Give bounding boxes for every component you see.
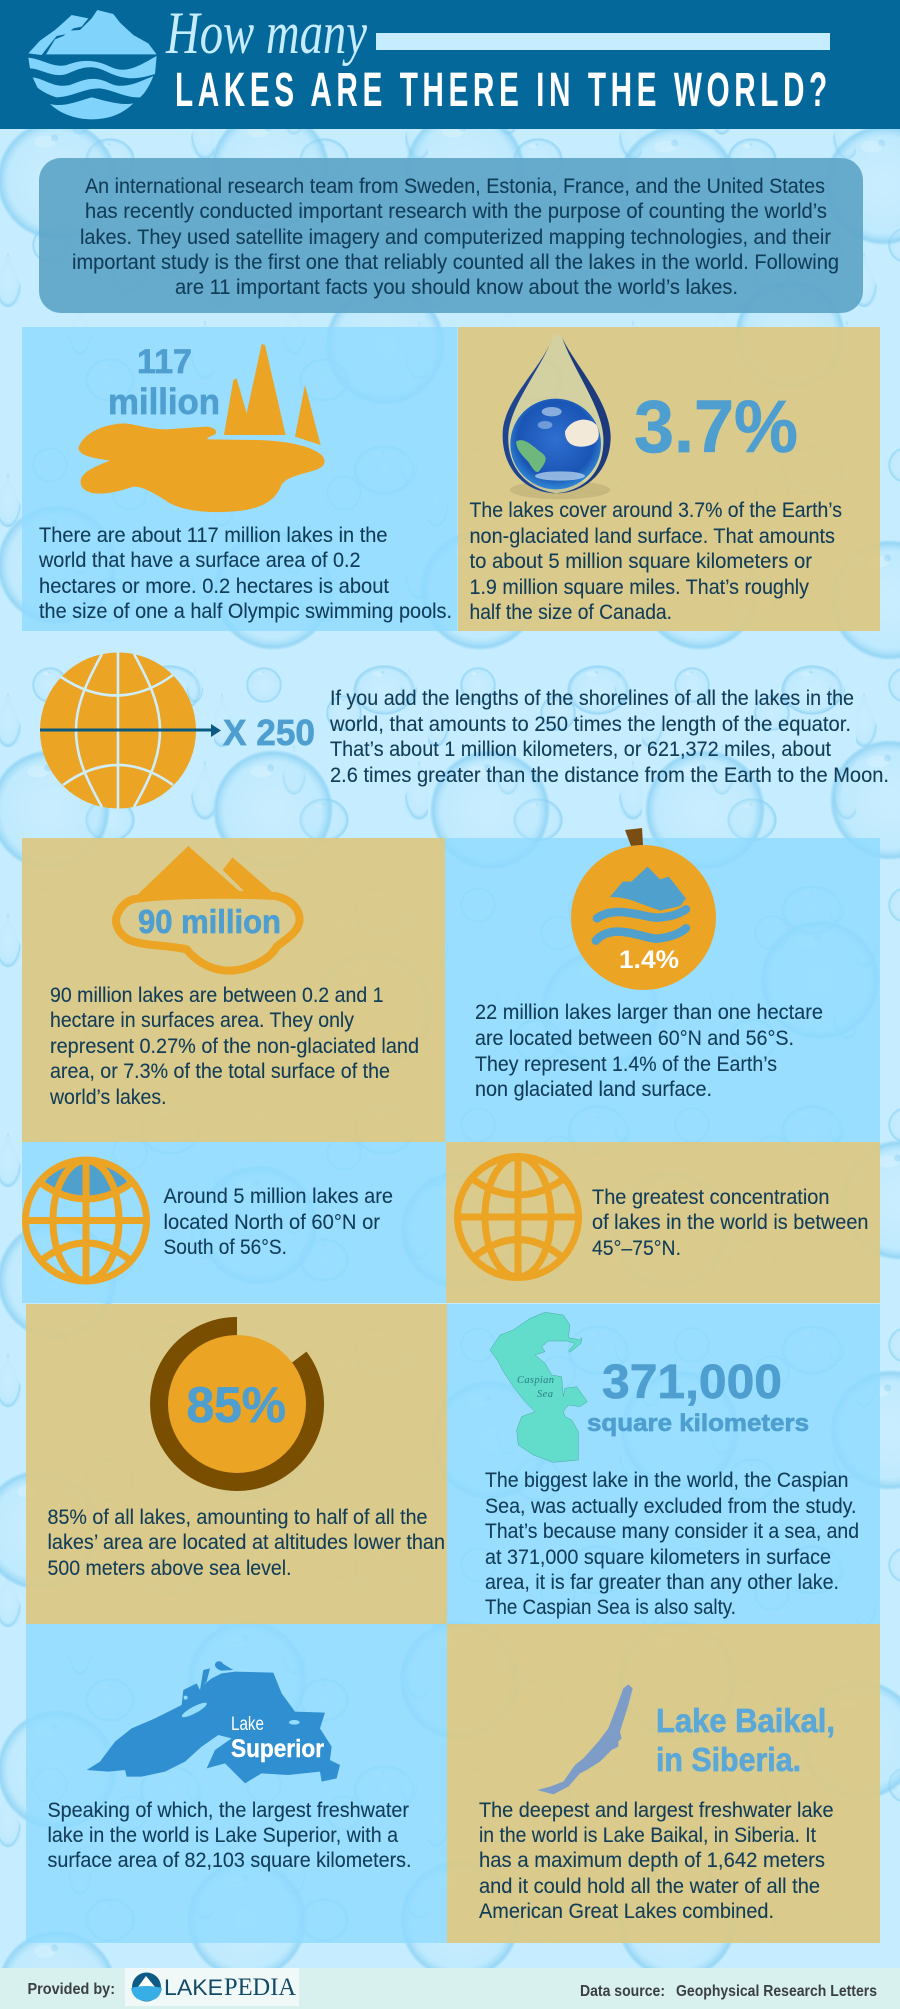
footer <box>0 1968 900 2009</box>
text: Lake Baikal: American Great Lakes combined. <box>479 1900 774 1923</box>
stat: 1.4%: 1.4% <box>619 946 679 974</box>
icon: Lake Superior map <box>87 1661 340 1783</box>
provided by label: Provided by: <box>28 1981 115 1998</box>
text: Lake Baikal <box>479 1799 834 1923</box>
text: 90 million: 90 million lakes are between 0.2 and 1 <box>50 984 384 1007</box>
icon: globe outline <box>457 1156 579 1278</box>
text: greatest concentration: The greatest concentration <box>592 1186 830 1209</box>
text: 5 million lakes: South of 56°S. <box>164 1236 287 1259</box>
section: shorelines x 250 <box>40 652 889 809</box>
icon: mountain and lake outline <box>116 846 300 971</box>
logo: LakePedia: LAKE <box>164 1975 223 2000</box>
icon: orange lake with peaks <box>78 344 325 512</box>
text: 85 percent: 500 meters above sea level. <box>48 1557 292 1580</box>
title script line: How many <box>165 0 367 66</box>
panel: intro <box>39 158 863 313</box>
stat: 117 million: 117 <box>137 343 192 381</box>
icon: Lake Superior map: Lake <box>231 1714 264 1735</box>
panel: Lake Superior <box>26 1624 447 1943</box>
text: Lake Baikal: in the world is Lake Baikal, in Siberia. It <box>479 1824 816 1847</box>
text: 3.7 percent: The lakes cover around 3.7% of the Earth’s <box>470 499 842 522</box>
text: Caspian Sea: The Caspian Sea is also salty. <box>485 1596 736 1619</box>
intro text: are 11 important facts you should know about the world’s lakes. <box>175 276 738 299</box>
text: 90 million: hectare in surfaces area. They only <box>50 1009 354 1032</box>
text: 3.7 percent: 1.9 million square miles. That’s roughly <box>470 576 809 599</box>
panel: 5 million lakes <box>22 1142 446 1303</box>
text: greatest concentration: of lakes in the world is between <box>592 1211 868 1234</box>
panel: 85 percent <box>26 1304 447 1624</box>
text: 3.7 percent: non-glaciated land surface. That amounts <box>470 525 835 548</box>
panel: 3.7 percent <box>458 327 880 631</box>
text: greatest concentration: 45°–75°N. <box>592 1237 681 1260</box>
text: 117 million lakes: There are about 117 million lakes in the <box>39 524 388 547</box>
icon: orange circle with iceberg and waves <box>571 828 716 990</box>
icon: Lake Superior map: Superior <box>231 1735 324 1763</box>
intro text <box>72 175 839 299</box>
text: Lake Superior: Speaking of which, the largest freshwater <box>48 1799 409 1822</box>
stat: 371,000 square kilometers <box>587 1356 809 1437</box>
text: 1.4 percent <box>475 1001 823 1101</box>
text: greatest concentration <box>592 1186 868 1260</box>
heading: Lake Baikal, in Siberia <box>656 1702 835 1778</box>
text: shorelines: world, that amounts to 250 times the length of the equator. <box>329 713 851 736</box>
data source <box>580 1983 877 2000</box>
logo: LakePedia <box>125 1968 299 2006</box>
text: Caspian Sea: The biggest lake in the world, the Caspian <box>485 1469 848 1492</box>
text: 1.4 percent: are located between 60°N and 56°S. <box>475 1027 794 1050</box>
text: 85 percent: 85% of all lakes, amounting to half of all the <box>48 1506 428 1529</box>
stat: 371,000 square kilometers: square kilometers <box>587 1410 809 1437</box>
stat: 85%: 85% <box>186 1377 286 1433</box>
text: Lake Baikal: and it could hold all the water of all the <box>479 1875 820 1898</box>
text: 90 million: represent 0.27% of the non-glaciated land <box>50 1035 419 1058</box>
text: Lake Superior: lake in the world is Lake Superior, with a <box>48 1824 398 1847</box>
icon: earth in water drop <box>503 334 611 499</box>
data source: Data source: <box>580 1983 665 2000</box>
chart: 85 percent ring <box>150 1317 324 1491</box>
text: shorelines: 2.6 times greater than the distance from the Earth to the Moon. <box>330 764 889 787</box>
icon: globe with polar cap <box>25 1158 147 1282</box>
text: Caspian Sea: Sea, was actually excluded from the study. <box>485 1495 856 1518</box>
stat: 117 million: million <box>108 381 220 422</box>
heading: Lake Baikal, in Siberia: Lake Baikal, <box>656 1702 835 1739</box>
text: 85 percent: lakes’ area are located at altitudes lower than <box>48 1531 445 1554</box>
text: 117 million lakes: the size of one a half Olympic swimming pools. <box>39 600 452 623</box>
icon: Caspian Sea map: Caspian <box>517 1375 554 1386</box>
icon: Caspian Sea map <box>490 1312 587 1462</box>
icon: globe with equator arrow <box>40 652 221 809</box>
text: 90 million <box>49 984 419 1109</box>
panel: Caspian Sea <box>447 1304 880 1624</box>
text: 5 million lakes: located North of 60°N or <box>164 1211 380 1234</box>
panel: 117 million lakes <box>22 327 458 631</box>
text: shorelines: That’s about 1 million kilometers, or 621,372 miles, about <box>330 738 831 761</box>
icon: iceberg logo <box>28 10 157 119</box>
text: 85 percent <box>48 1506 445 1580</box>
text: 117 million lakes: hectares or more. 0.2 hectares is about <box>39 575 389 598</box>
text: 1.4 percent: They represent 1.4% of the Earth’s <box>475 1053 777 1076</box>
text: 5 million lakes: Around 5 million lakes are <box>164 1185 393 1208</box>
text: 1.4 percent: 22 million lakes larger than one hectare <box>475 1001 823 1024</box>
text: shorelines <box>329 687 889 787</box>
text: Lake Superior <box>48 1799 412 1872</box>
text: 3.7 percent <box>470 499 842 624</box>
text: Caspian Sea: at 371,000 square kilometers in surface <box>485 1546 831 1569</box>
intro text: lakes. They used satellite imagery and computerized mapping technologies, and their <box>80 226 831 249</box>
text: 1.4 percent: non glaciated land surface. <box>475 1078 712 1101</box>
text: 117 million lakes: world that have a surface area of 0.2 <box>38 549 361 572</box>
text: Lake Superior: surface area of 82,103 square kilometers. <box>48 1849 412 1872</box>
text: 3.7 percent: half the size of Canada. <box>470 601 672 624</box>
title bar <box>376 33 830 50</box>
text: shorelines: If you add the lengths of the shorelines of all the lakes in the <box>330 687 854 710</box>
intro text: An international research team from Sweden, Estonia, France, and the United States <box>85 175 825 198</box>
text: 117 million lakes <box>38 524 452 623</box>
heading: Lake Baikal, in Siberia: in Siberia. <box>656 1741 801 1778</box>
intro text: has recently conducted important research with the purpose of counting the world’s <box>85 200 827 223</box>
stat: 371,000 square kilometers: 371,000 <box>602 1356 782 1409</box>
text: 5 million lakes <box>164 1185 393 1259</box>
intro text: important study is the first one that reliably counted all the lakes in the world. Following <box>72 251 839 274</box>
title main line: LAKES ARE THERE IN THE WORLD? <box>175 64 827 117</box>
stat: 90 million: 90 million <box>138 903 281 940</box>
header banner <box>0 0 900 129</box>
icon: Lake Baikal map <box>537 1684 633 1794</box>
stat: 117 million <box>108 343 220 422</box>
text: Lake Baikal: The deepest and largest freshwater lake <box>479 1799 834 1822</box>
text: 3.7 percent: to about 5 million square kilometers or <box>470 550 812 573</box>
logo: LakePedia: PEDIA <box>224 1974 296 2001</box>
data source: Geophysical Research Letters <box>676 1983 877 2000</box>
icon: Caspian Sea map: Sea <box>537 1389 553 1400</box>
text: 90 million: area, or 7.3% of the total surface of the <box>50 1060 390 1083</box>
text: Caspian Sea: area, it is far greater than any other lake. <box>485 1571 839 1594</box>
panel: 1.4 percent <box>445 828 880 1142</box>
panel: Lake Baikal <box>447 1624 880 1943</box>
text: Lake Baikal: has a maximum depth of 1,642 meters <box>479 1849 825 1872</box>
panel: greatest concentration <box>446 1142 880 1303</box>
stat: x 250: X 250 <box>223 712 315 753</box>
stat: 3.7%: 3.7% <box>634 385 798 468</box>
text: Caspian Sea <box>485 1469 859 1619</box>
text: Caspian Sea: That’s because many consider it a sea, and <box>485 1520 859 1543</box>
text: 90 million: world’s lakes. <box>49 1086 166 1109</box>
panel: 90 million <box>22 838 445 1142</box>
